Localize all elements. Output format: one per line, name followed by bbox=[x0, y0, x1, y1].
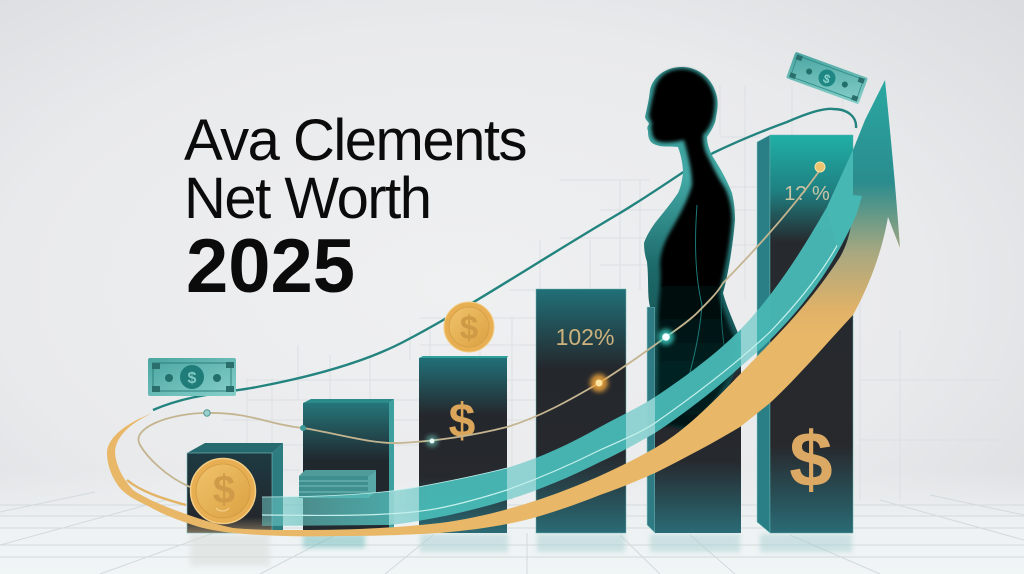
gold swoosh and arrow bbox=[107, 80, 900, 536]
dollar sign on bar 3: $ bbox=[449, 395, 476, 448]
dollar sign on bar 6: $ bbox=[789, 415, 833, 503]
bar 2 bbox=[303, 399, 394, 530]
lighter ribbon sections over the gaps between bars bbox=[389, 300, 757, 530]
floor reflections of the bars bbox=[190, 534, 852, 566]
title: Ava Clements bbox=[184, 108, 526, 173]
bar 1 bbox=[187, 443, 283, 533]
person silhouette bbox=[644, 67, 742, 432]
marker on bar 6 bbox=[815, 162, 825, 172]
glowing marker on bar 5 bbox=[658, 329, 674, 345]
marker on bar 2 bbox=[300, 425, 306, 431]
glowing marker on bar 4 bbox=[590, 374, 608, 392]
banknote left: $ bbox=[188, 370, 197, 387]
102% label: 102% bbox=[556, 324, 614, 350]
glowing marker on bar 3 bbox=[426, 435, 438, 447]
background grid behind chart bbox=[223, 85, 1000, 500]
gold coin on bar 3 bbox=[444, 302, 494, 352]
thin gold branch of the swoosh bbox=[127, 480, 186, 505]
bar 4 bbox=[536, 289, 626, 533]
gold coin on bar 3: $ bbox=[460, 309, 478, 346]
translucent teal ribbon bbox=[262, 150, 862, 530]
partly legible percentage label: 1? % bbox=[784, 183, 830, 205]
marker on left loop bbox=[204, 410, 210, 416]
ribbon highlight lines bbox=[262, 203, 857, 515]
gold coin front bbox=[190, 458, 256, 524]
gold coin front: $ bbox=[213, 468, 235, 512]
bar 3 bbox=[419, 356, 508, 533]
title bbox=[184, 108, 526, 309]
banknote left bbox=[148, 358, 236, 396]
stack of banknotes bbox=[299, 470, 376, 498]
banknote top right: $ bbox=[821, 71, 832, 87]
bar 6 bbox=[757, 135, 853, 533]
thin tan trend line with markers bbox=[138, 162, 825, 487]
thin teal trend line bbox=[153, 109, 856, 410]
title: Net Worth bbox=[184, 166, 431, 231]
banknote top right bbox=[786, 52, 868, 104]
ribbon tip redrawn above the arrow body bbox=[827, 150, 862, 248]
bar 5 bbox=[647, 307, 741, 533]
title: 2025 bbox=[186, 224, 355, 309]
floor with perspective grid bbox=[0, 470, 1024, 574]
